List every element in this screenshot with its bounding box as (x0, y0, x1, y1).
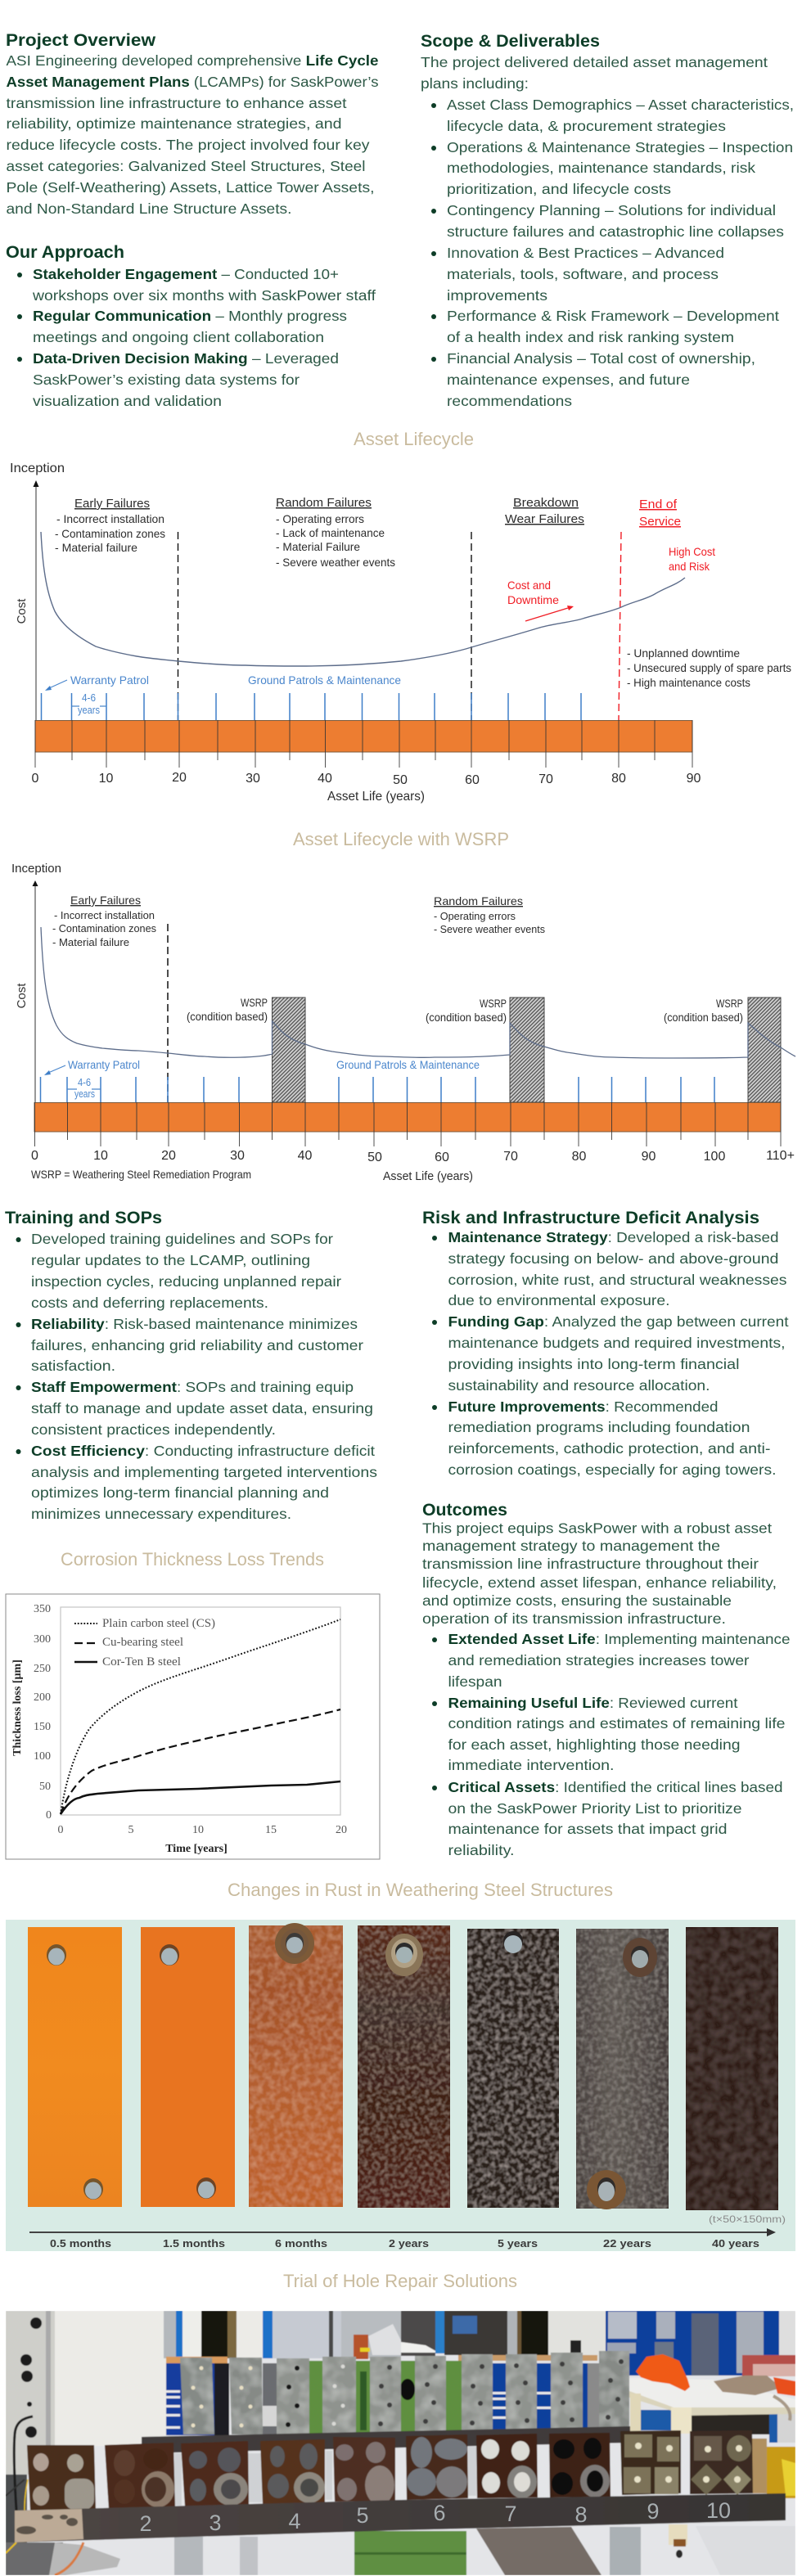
text block: scope intro: plans including: (421, 75, 529, 92)
label group: random failures: - Severe weather events (276, 556, 395, 569)
heading: changes in rust: Changes in Rust in Weathering Steel Structures (228, 1880, 613, 1900)
axis tick labels (31, 1149, 795, 1164)
specimen: 1.5 months (141, 1927, 235, 2207)
list: training bullets: Reliability : Risk-based maintenance minimizes (31, 1316, 358, 1332)
list: outcomes bullets: Remaining Useful Life : Reviewed current (448, 1695, 738, 1711)
background: parts racks (606, 2311, 795, 2376)
label group: end of service: End of (639, 498, 678, 511)
panel: corrosion chart (6, 1594, 380, 1859)
specimen: 2 years (358, 1925, 450, 2208)
list: training bullets: Cost Efficiency : Conducting infrastructure deficit (31, 1443, 375, 1459)
label group: early failures (55, 497, 165, 554)
legend: Cor-Ten B steel (102, 1655, 181, 1669)
wsrp labels: (condition based) (187, 1010, 268, 1023)
arrow: cost and downtime (525, 606, 574, 621)
curve: plain carbon steel (61, 1619, 340, 1814)
legend: Plain carbon steel (CS) (102, 1617, 215, 1630)
list: training bullets: failures, enhancing grid reliability and customer (31, 1337, 363, 1353)
chalk numbers on beam: 5 (356, 2503, 369, 2528)
axis tick labels: 90 (642, 1150, 656, 1164)
label group: early failures: Early Failures (70, 894, 141, 907)
axis tick labels (32, 771, 701, 787)
axis: cost vertical axis with arrow (33, 880, 38, 1102)
label group: early failures: - Contamination zones (52, 922, 156, 934)
cost curve with resets (41, 927, 795, 1058)
label group: random failures: - Material Failure (276, 540, 360, 553)
list: deliverables bullets: maintenance expenses, and future (447, 372, 690, 388)
callouts: cost and risk: High Cost (669, 545, 715, 558)
axis ticks (35, 720, 692, 768)
label: warranty patrol with arrow (44, 1058, 140, 1075)
label group: random failures: - Operating errors (276, 512, 364, 525)
axis title: time: Time [years] (165, 1843, 228, 1855)
label group: random failures: - Severe weather events (434, 923, 545, 935)
label: 4-6 years interval (72, 691, 106, 716)
x axis tick labels: 10 (192, 1824, 204, 1836)
background: upper shop wall and machines (164, 2311, 606, 2363)
text block: overview paragraph: ASI Engineering developed comprehensive Life Cycle (7, 52, 379, 69)
list: end of life consequences: - Unsecured supply of spare parts (627, 661, 791, 674)
list: deliverables bullets: lifecycle data, & procurement strategies (447, 118, 726, 134)
list: deliverables bullets: Innovation & Best Practices – Advanced (447, 245, 724, 261)
wsrp labels: (condition based) (426, 1011, 507, 1024)
list: outcomes bullets: lifespan (448, 1673, 502, 1690)
table and bag (629, 2376, 795, 2558)
label: 4-6 years interval: 4-6 (82, 691, 96, 704)
text block: outcomes paragraph (422, 1520, 777, 1627)
y axis tick labels: 250 (34, 1663, 51, 1675)
chalk numbers on beam: 2 (139, 2511, 152, 2536)
text block: outcomes paragraph: This project equips SaskPower with a robust asset (422, 1520, 772, 1537)
label group: early failures: Early Failures (74, 497, 150, 511)
list: risk bullets: Funding Gap : Analyzed the gap between current (448, 1313, 789, 1330)
label: inception: Inception (10, 462, 65, 475)
background: equipment panel (6, 2311, 56, 2543)
list: approach bullets (17, 266, 376, 409)
label: warranty patrol with arrow (45, 673, 149, 691)
label group: early failures: - Incorrect installation (56, 512, 164, 525)
list: deliverables bullets: improvements (447, 287, 547, 304)
list: risk bullets (432, 1229, 789, 1478)
axis tick labels: 80 (572, 1150, 586, 1164)
axis tick labels: 70 (538, 772, 553, 786)
axis tick labels: 10 (99, 772, 113, 786)
text block: overview paragraph: reduce lifecycle costs. The project involved four key (7, 137, 370, 153)
heading: training and sops: Training and SOPs (5, 1209, 162, 1227)
legend: Cu-bearing steel (102, 1636, 183, 1649)
list: training bullets: costs and deferring replacements. (31, 1295, 268, 1311)
background: cabinets behind plates (166, 2355, 599, 2435)
hatched wsrp blocks (272, 998, 781, 1102)
wsrp labels: WSRP (480, 997, 507, 1010)
list: outcomes bullets: reliability. (448, 1842, 514, 1858)
cost curve (41, 532, 685, 666)
list: approach bullets: Stakeholder Engagement – Conducted 10+ (33, 266, 339, 282)
list: deliverables bullets: Asset Class Demographics – Asset characteristics, (447, 97, 794, 113)
blue patrol ticks (41, 693, 581, 720)
label group: breakdown wear failures: Breakdown (513, 496, 579, 510)
heading: asset lifecycle: Asset Lifecycle (354, 429, 474, 449)
photo: trial of hole repair solutions (6, 2311, 795, 2575)
text block: overview paragraph: reliability, optimize maintenance strategies, and (7, 115, 342, 132)
list: deliverables bullets: methodologies, maintenance standards, risk (447, 160, 755, 176)
section: our approach (6, 243, 376, 409)
specimen: 40 years (686, 1927, 778, 2210)
specimen: 6 months (249, 1923, 343, 2207)
label: cost axis: Cost (15, 598, 29, 624)
text block: scope intro (421, 54, 768, 92)
chalk numbers on beam: 9 (647, 2499, 660, 2524)
list: risk bullets: maintenance budgets and required investments, (448, 1335, 786, 1351)
section: outcomes (422, 1501, 791, 1858)
list: end of life consequences (627, 646, 791, 689)
list: training bullets: consistent practices independently. (31, 1421, 276, 1438)
list: training bullets (16, 1231, 377, 1522)
list: outcomes bullets: maintenance for assets that impact grid (448, 1821, 727, 1837)
list: approach bullets: visualization and validation (33, 393, 222, 409)
list: risk bullets: reinforcements, cathodic protection, and anti- (448, 1440, 771, 1457)
axis title: Asset Life (years) (383, 1169, 473, 1183)
timeline labels: 5 years (498, 2237, 538, 2249)
label group: early failures (52, 894, 156, 948)
label: 4-6 years interval: 4-6 (78, 1076, 91, 1088)
beam end marks (16, 2515, 78, 2534)
list: end of life consequences: - Unplanned downtime (627, 646, 740, 660)
list: training bullets: Staff Empowerment : SOPs and training equip (31, 1379, 354, 1395)
section: scope and deliverables (421, 32, 794, 409)
specimen: 0.5 months (28, 1927, 122, 2207)
axis ticks (34, 1102, 781, 1146)
curve: cu-bearing steel (61, 1709, 340, 1814)
list: outcomes bullets: on the SaskPower Priority List to prioritize (448, 1800, 741, 1817)
timeline labels (50, 2237, 759, 2249)
list: outcomes bullets: for each asset, highlighting those needing (448, 1736, 740, 1753)
list: risk bullets: Maintenance Strategy : Developed a risk-based (448, 1229, 779, 1245)
floor and lower cabinet (6, 2526, 642, 2575)
list: approach bullets: meetings and ongoing client collaboration (33, 329, 324, 345)
label group: breakdown wear failures: Wear Failures (505, 512, 584, 526)
list: risk bullets: due to environmental exposure. (448, 1292, 669, 1308)
y axis tick labels: 50 (39, 1781, 51, 1793)
list: risk bullets: corrosion coatings, especially for aging towers. (448, 1461, 776, 1478)
heading: scope and deliverables: Scope & Deliverables (421, 32, 600, 51)
specimen: 5 years (467, 1929, 559, 2208)
list: end of life consequences: - High maintenance costs (627, 676, 750, 689)
list: deliverables bullets (431, 97, 794, 409)
repair patches (33, 2434, 751, 2510)
list: training bullets: optimizes long-term financial planning and (31, 1484, 329, 1501)
panel: rust specimens (6, 1920, 795, 2251)
galvanized plates (180, 2351, 629, 2434)
y axis tick labels: 300 (34, 1633, 51, 1646)
orange life bar (34, 1103, 781, 1132)
label group: end of service: Service (639, 515, 681, 529)
list: deliverables bullets: Performance & Risk Framework – Development (447, 308, 779, 324)
galvanized plate holes (191, 2359, 624, 2427)
heading: asset lifecycle with wsrp: Asset Lifecycle with WSRP (293, 829, 509, 849)
label group: early failures: - Material failure (52, 936, 129, 948)
list: risk bullets: remediation programs including foundation (448, 1419, 750, 1435)
section: project overview (6, 31, 379, 217)
note: wsrp definition: WSRP = Weathering Steel Remediation Program (31, 1168, 251, 1181)
x axis tick labels: 15 (265, 1824, 277, 1836)
dashed phase divider (167, 924, 169, 1102)
text block: scope intro: The project delivered detailed asset management (421, 54, 768, 70)
list: risk bullets: providing insights into long-term financial (448, 1356, 740, 1372)
text block: overview paragraph (7, 52, 379, 217)
beam with chalk labels (15, 2493, 786, 2542)
text block: overview paragraph: asset categories: Galvanized Steel Structures, Steel (7, 158, 365, 174)
dashed phase dividers (178, 532, 621, 720)
y axis tick labels: 350 (34, 1603, 51, 1615)
timeline labels: 22 years (603, 2237, 651, 2249)
label group: random failures (276, 496, 395, 569)
text block: outcomes paragraph: management strategy to management the (422, 1538, 720, 1554)
axis tick labels: 110+ (766, 1149, 795, 1163)
chalk numbers on beam: 6 (433, 2501, 446, 2525)
list: deliverables bullets: Financial Analysis – Total cost of ownership, (447, 350, 755, 367)
timeline labels: 6 months (275, 2237, 327, 2249)
axis tick labels: 10 (93, 1149, 108, 1163)
list: training bullets: regular updates to the LCAMP, outlining (31, 1252, 310, 1268)
chart: asset lifecycle (10, 462, 791, 804)
hard hat (636, 2354, 690, 2391)
axis tick labels: 50 (393, 773, 408, 787)
axis title: Asset Life (years) (327, 790, 425, 804)
heading: trial of hole repair solutions: Trial of Hole Repair Solutions (283, 2271, 517, 2291)
axis tick labels: 80 (611, 772, 626, 786)
list: outcomes bullets (432, 1631, 791, 1858)
background: left white cabinet (108, 2435, 165, 2444)
list: training bullets: Developed training guidelines and SOPs for (31, 1231, 333, 1247)
timeline labels: 40 years (712, 2237, 759, 2249)
label: warranty patrol with arrow: Warranty Patrol (70, 673, 149, 687)
list: outcomes bullets: Critical Assets : Identified the critical lines based (448, 1779, 782, 1795)
list: training bullets: minimizes unnecessary expenditures. (31, 1506, 291, 1522)
timeline arrow (29, 2228, 776, 2236)
chalk numbers on beam (141, 2502, 730, 2531)
axis tick labels: 20 (172, 771, 187, 785)
axis tick labels: 0 (32, 772, 39, 786)
list: deliverables bullets: recommendations (447, 393, 572, 409)
list: outcomes bullets: and remediation strategies increases tower (448, 1652, 750, 1669)
list: outcomes bullets: condition ratings and estimates of remaining life (448, 1715, 786, 1732)
specimen: 22 years (576, 1929, 669, 2209)
text block: outcomes paragraph: operation of its transmission infrastructure. (422, 1610, 726, 1627)
heading: outcomes: Outcomes (422, 1501, 507, 1520)
timeline labels: 0.5 months (50, 2237, 111, 2249)
axis tick labels: 0 (31, 1149, 38, 1163)
axis tick labels: 40 (298, 1149, 313, 1163)
chalk numbers on beam: 4 (288, 2509, 301, 2533)
x axis tick labels: 5 (128, 1824, 134, 1836)
list: outcomes bullets: immediate intervention. (448, 1757, 614, 1773)
axis tick labels: 40 (318, 772, 332, 786)
list: deliverables bullets: materials, tools, software, and process (447, 266, 719, 282)
beam painted end (15, 2509, 83, 2542)
timeline labels: 1.5 months (163, 2237, 225, 2249)
legend (74, 1617, 215, 1669)
list: training bullets: staff to manage and update asset data, ensuring (31, 1400, 373, 1416)
heading: project overview: Project Overview (6, 31, 156, 50)
curve: cor-ten b steel (61, 1781, 340, 1814)
note: specimen size: (t×50×150mm) (709, 2213, 786, 2225)
list: training bullets: satisfaction. (31, 1358, 115, 1374)
list: risk bullets: Future Improvements : Recommended (448, 1398, 719, 1415)
list: training bullets: inspection cycles, reducing unplanned repair (31, 1273, 341, 1290)
list: approach bullets: SaskPower’s existing data systems for (33, 372, 300, 388)
label group: early failures: - Material failure (55, 541, 137, 554)
list: deliverables bullets: Operations & Maintenance Strategies – Inspection (447, 139, 793, 155)
axis tick labels: 50 (367, 1151, 382, 1164)
chalk numbers on beam: 8 (574, 2502, 588, 2527)
wsrp labels: WSRP (241, 996, 268, 1009)
list: deliverables bullets: structure failures and catastrophic line collapses (447, 223, 784, 240)
list: risk bullets: strategy focusing on below- and above-ground (448, 1250, 779, 1267)
text block: overview paragraph: Asset Management Plans (LCAMPs) for SaskPower’s (7, 74, 379, 90)
list: approach bullets: Data-Driven Decision Making – Leveraged (33, 350, 339, 367)
label group: end of service (639, 498, 681, 529)
x axis tick labels: 20 (336, 1824, 347, 1836)
x axis tick labels (57, 1824, 347, 1836)
axis tick labels: 30 (230, 1149, 245, 1163)
label: inception: Inception (11, 862, 61, 876)
y axis tick labels: 150 (34, 1721, 51, 1733)
label: 4-6 years interval (67, 1076, 101, 1100)
photo scene (6, 2311, 795, 2575)
axis tick labels: 20 (161, 1149, 176, 1163)
label: ground patrols and maintenance: Ground Patrols & Maintenance (336, 1058, 480, 1071)
orange life bar (35, 720, 692, 752)
heading: corrosion thickness loss trends: Corrosion Thickness Loss Trends (61, 1549, 324, 1569)
text block: overview paragraph: transmission line infrastructure to enhance asset (7, 95, 347, 111)
back support beam (142, 2426, 630, 2453)
list: outcomes bullets: Extended Asset Life : Implementing maintenance (448, 1631, 791, 1647)
axis tick labels: 70 (503, 1150, 518, 1164)
text block: outcomes paragraph: and optimize costs, ensuring the sustainable (422, 1592, 732, 1609)
section: risk and infrastructure deficit analysis (422, 1209, 789, 1478)
plot frame (61, 1607, 340, 1815)
chart: asset lifecycle with wsrp (11, 862, 795, 1183)
label group: breakdown wear failures (505, 496, 584, 526)
y axis tick labels: 100 (34, 1750, 51, 1763)
callouts: cost and risk: Cost and (507, 579, 551, 592)
wsrp labels: WSRP (716, 997, 743, 1010)
list: approach bullets: workshops over six months with SaskPower staff (32, 287, 376, 304)
text block: outcomes paragraph: lifecycle, extend asset lifespan, enhance reliability, (422, 1574, 777, 1591)
chalk numbers on beam: 7 (504, 2502, 517, 2526)
axis: cost vertical axis with arrow (33, 480, 39, 720)
list: deliverables bullets: Contingency Planning – Solutions for individual (447, 202, 776, 218)
label: 4-6 years interval: years (74, 1088, 95, 1100)
axis tick labels: 60 (465, 773, 480, 787)
x axis tick labels: 0 (57, 1824, 64, 1836)
axis tick labels: 90 (687, 772, 701, 786)
list: training bullets: analysis and implementing targeted interventions (31, 1464, 377, 1480)
chalk numbers on beam: 10 (706, 2498, 731, 2523)
text block: outcomes paragraph: transmission line infrastructure throughout their (422, 1556, 759, 1572)
heading: our approach: Our Approach (6, 243, 124, 262)
callouts: cost and risk (507, 545, 715, 606)
y axis tick labels: 200 (34, 1691, 51, 1704)
timeline labels: 2 years (389, 2237, 429, 2249)
label group: random failures: - Operating errors (434, 910, 516, 922)
axis title: thickness loss: Thickness loss [µm] (11, 1660, 24, 1756)
y axis tick labels: 0 (46, 1809, 52, 1822)
label group: early failures: - Incorrect installation (54, 909, 155, 921)
chalk numbers on beam: 3 (209, 2511, 222, 2535)
label group: early failures: - Contamination zones (55, 527, 165, 540)
label: warranty patrol with arrow: Warranty Patrol (68, 1058, 140, 1071)
y axis tick labels (34, 1603, 52, 1822)
callouts: cost and risk: Downtime (507, 593, 559, 606)
light supports between plates (174, 2447, 476, 2506)
list: deliverables bullets: prioritization, and lifecycle costs (447, 181, 671, 197)
axis tick labels: 60 (435, 1151, 449, 1164)
list: approach bullets: Regular Communication – Monthly progress (33, 308, 347, 324)
wsrp labels (187, 996, 743, 1024)
label: ground patrols and maintenance: Ground Patrols & Maintenance (248, 673, 401, 687)
blue patrol ticks (41, 1077, 714, 1102)
label: 4-6 years interval: years (78, 704, 100, 716)
callouts: cost and risk: and Risk (669, 560, 710, 573)
list: risk bullets: sustainability and resource allocation. (448, 1377, 710, 1394)
label group: random failures (434, 894, 545, 935)
label group: random failures: Random Failures (434, 894, 523, 907)
label group: random failures: - Lack of maintenance (276, 526, 385, 539)
axis tick labels: 30 (246, 772, 260, 786)
text block: overview paragraph: Pole (Self-Weathering) Assets, Lattice Tower Assets, (7, 179, 375, 196)
label: cost axis: Cost (15, 983, 29, 1008)
label group: random failures: Random Failures (276, 496, 372, 510)
list: risk bullets: corrosion, white rust, and structural weaknesses (448, 1272, 787, 1288)
heading: risk and infrastructure deficit analysis: Risk and Infrastructure Deficit Analysis (422, 1209, 759, 1227)
section: training and sops (5, 1209, 377, 1522)
text block: overview paragraph: and Non-Standard Line Structure Assets. (7, 200, 291, 217)
cardboard and yellow items (750, 2439, 795, 2498)
rusted repair plates (27, 2430, 753, 2511)
list: deliverables bullets: of a health index and risk ranking system (447, 329, 734, 345)
wsrp labels: (condition based) (664, 1011, 743, 1024)
axis tick labels: 100 (704, 1150, 725, 1164)
